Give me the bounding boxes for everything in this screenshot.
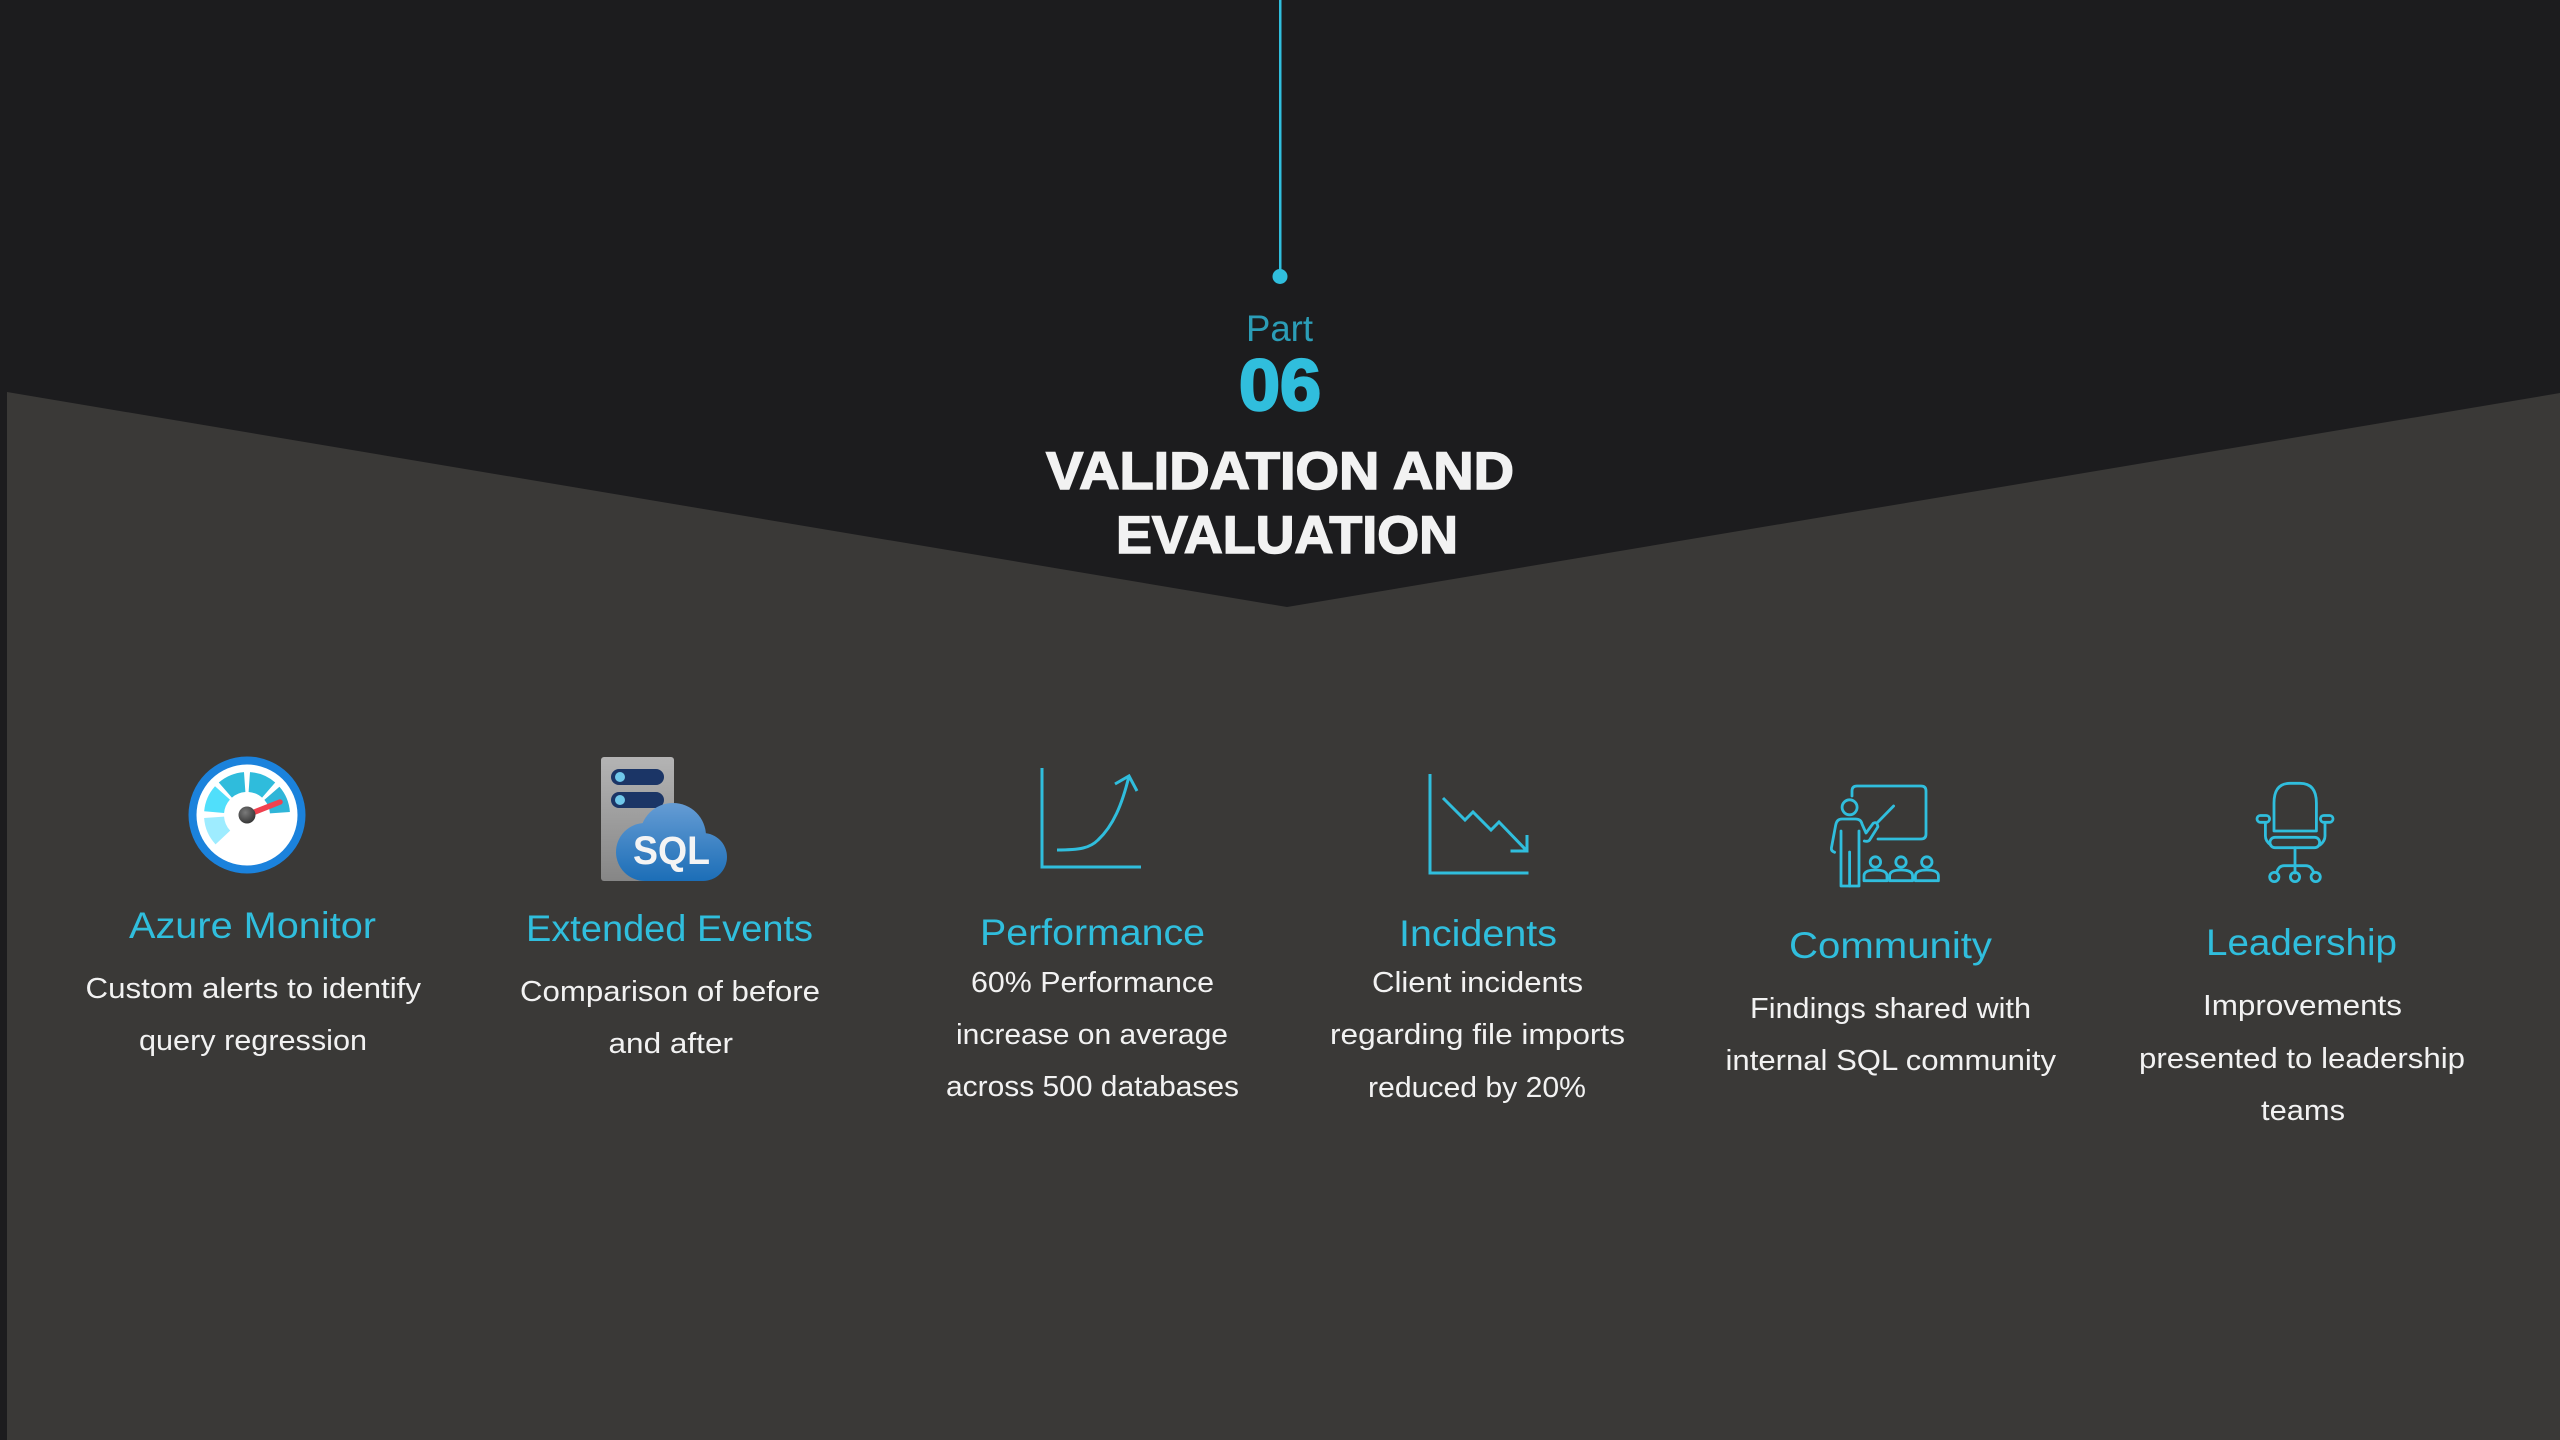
lower background panel [7, 392, 2560, 1440]
heading: Extended Events [526, 908, 813, 949]
title [1046, 442, 1514, 565]
column: Extended Events [520, 757, 820, 1060]
icon: SQL server cloud [601, 757, 727, 881]
description: Comparison of before [520, 976, 820, 1008]
description: Custom alerts to identify [86, 973, 422, 1005]
heading: Incidents [1399, 913, 1557, 954]
column: Performance [946, 768, 1239, 1103]
description [86, 973, 422, 1057]
description: teams [2261, 1095, 2345, 1127]
description: Improvements [2203, 990, 2402, 1022]
description: regarding file imports [1330, 1019, 1625, 1051]
icon: falling chart [1430, 774, 1528, 873]
heading: Leadership [2206, 922, 2397, 963]
column: Leadership [2139, 783, 2465, 1127]
icon: rising chart [1042, 768, 1141, 867]
description: Client incidents [1372, 967, 1583, 999]
column: Community [1726, 786, 2057, 1077]
icon: gauge [188, 756, 306, 874]
description [520, 976, 820, 1060]
heading: Community [1789, 925, 1993, 966]
description: increase on average [956, 1019, 1228, 1051]
description: Findings shared with [1750, 993, 2031, 1025]
heading: Azure Monitor [129, 905, 376, 946]
section label: Part: Part [1246, 308, 1314, 349]
title: VALIDATION AND [1046, 442, 1514, 501]
icon: presenter with audience [1831, 786, 1938, 886]
title: EVALUATION [1116, 506, 1458, 565]
icon: office chair [2257, 783, 2333, 882]
description: 60% Performance [971, 967, 1214, 999]
description: presented to leadership [2139, 1043, 2465, 1075]
icon: SQL server cloud: SQL [633, 829, 710, 873]
description: and after [608, 1028, 733, 1060]
description [946, 967, 1239, 1103]
description [2139, 990, 2465, 1127]
description: reduced by 20% [1368, 1072, 1586, 1104]
description: across 500 databases [946, 1071, 1239, 1103]
heading: Performance [980, 912, 1205, 953]
description [1726, 993, 2057, 1077]
description: query regression [139, 1025, 367, 1057]
connector line with dot [1272, 0, 1288, 284]
section number: 06: 06 [1239, 346, 1321, 426]
description [1330, 967, 1625, 1104]
column: Azure Monitor [86, 756, 422, 1057]
column: Incidents [1330, 774, 1625, 1104]
description: internal SQL community [1726, 1045, 2057, 1077]
